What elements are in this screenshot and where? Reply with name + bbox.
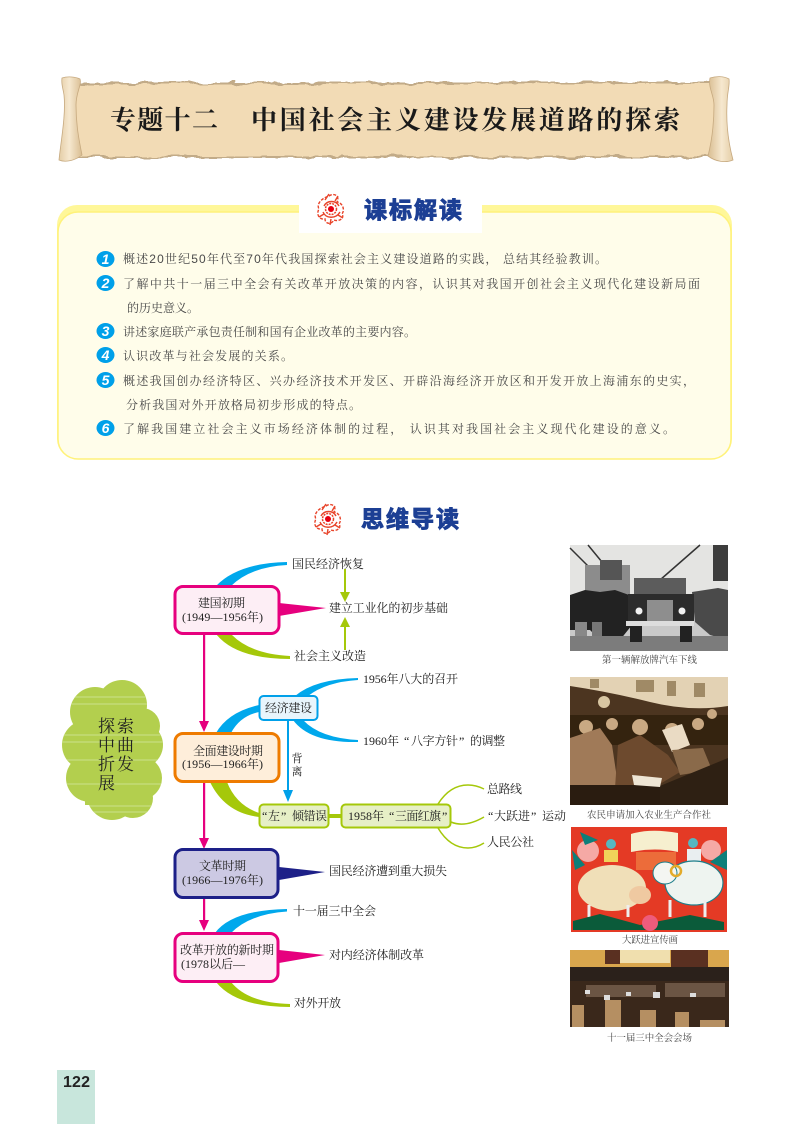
label: 大跃进运动	[488, 808, 566, 823]
box: 1958 三面红旗: ”	[442, 809, 447, 823]
box: 文革时期: 文革时期	[199, 858, 246, 873]
cloud text: 探	[98, 716, 115, 736]
box: 改革开放的新时期: (1978以后—	[181, 957, 246, 971]
label: 国民经济恢复: 国民经济恢复	[292, 556, 364, 571]
label: 1960年八字方针: 的调整	[470, 733, 505, 748]
label: 大跃进运动: 大跃进	[494, 808, 530, 823]
item 3: 讲述家庭联产承包责任制和国有企业改革的主要内容。	[123, 324, 416, 339]
arrow: 背离: 背	[292, 751, 302, 765]
connector: error to three red banners	[329, 814, 341, 818]
label: 社会主义改造: 社会主义改造	[294, 648, 366, 663]
cloud text: 展	[98, 774, 115, 793]
scroll paper body	[66, 82, 722, 158]
badge 5: 5	[102, 372, 110, 388]
badge 1: 1	[102, 251, 110, 267]
heading text: 思维导读	[361, 506, 459, 532]
arrows: timeline	[199, 634, 209, 931]
heading: 课标解读: 课标解读	[364, 197, 462, 223]
panel back band	[57, 205, 732, 459]
heading tab	[299, 203, 482, 233]
box: 左倾错误: ”	[281, 809, 286, 823]
photo: Great Leap poster	[571, 827, 727, 932]
item 1: 概述20世纪50年代至70年代我国探索社会主义建设道路的实践， 总结其经验教训。	[123, 251, 607, 266]
box: 全面建设时期: 全面建设时期	[193, 743, 263, 758]
box: 建国初期: 建国初期	[198, 595, 245, 610]
title text: 专题十二	[110, 105, 218, 135]
label: 对内经济体制改革: 对内经济体制改革	[329, 947, 424, 962]
box: 左倾错误: 左	[268, 809, 280, 823]
wedge: cultural revolution	[279, 867, 325, 880]
box: 左倾错误	[260, 804, 328, 828]
page number tab	[57, 1070, 95, 1124]
caption: photo 4: 十一届三中全会会场	[607, 1032, 692, 1044]
label: 1956年八大的召开: 1956年八大的召开	[363, 671, 458, 686]
badge 6	[96, 420, 114, 436]
item 4: 认识改革与社会发展的关系。	[123, 348, 293, 363]
box: 建国初期: (1949—1956年)	[182, 609, 263, 624]
cloud text: 折	[98, 755, 115, 774]
label: 建立工业化的初步基础: 建立工业化的初步基础	[329, 600, 448, 615]
box: 1958 三面红旗: “	[389, 809, 394, 823]
label: 1960年八字方针: “	[404, 734, 409, 748]
item 2: 了解中共十一届三中全会有关改革开放决策的内容，认识其对我国开创社会主义现代化建设新局面	[123, 276, 700, 291]
heading: thinking guide	[315, 504, 459, 535]
label: 1960年八字方针	[363, 733, 505, 748]
badge 4	[96, 347, 114, 363]
box: 改革开放的新时期	[175, 934, 278, 982]
crowd right	[692, 588, 728, 640]
box: 全面建设时期: (1956—1966年)	[182, 756, 263, 771]
badge 2	[96, 275, 114, 291]
badge 3	[96, 323, 114, 339]
photo: farmers join cooperative	[570, 677, 728, 805]
label: 对外开放: 对外开放	[294, 995, 341, 1010]
item 5: 分析我国对外开放格局初步形成的特点。	[126, 397, 361, 412]
branches: construction period	[210, 678, 358, 817]
branches: reform period	[215, 909, 325, 1007]
item 2: 的历史意义。	[127, 300, 199, 315]
page number: 122	[63, 1074, 90, 1091]
icon: dragon	[315, 504, 340, 535]
caption: photo 2: 农民申请加入农业生产合作社	[587, 809, 711, 821]
box: 文革时期	[175, 850, 278, 898]
box: 左倾错误: 倾错误	[292, 808, 327, 823]
badge 6: 6	[102, 420, 110, 436]
photo: Third Plenary Session hall	[570, 950, 729, 1027]
label: 人民公社: 人民公社	[487, 834, 534, 849]
photo: first Jiefang truck	[570, 545, 728, 651]
cloud text	[98, 716, 134, 793]
arrow: 背离	[283, 720, 302, 802]
arrow: 背离: 离	[292, 765, 302, 778]
badge 1	[96, 251, 114, 267]
badge 2: 2	[101, 275, 110, 291]
caption: photo 3: 大跃进宣传画	[622, 934, 678, 946]
box: 全面建设时期	[175, 734, 279, 782]
cloud node: main theme	[60, 680, 165, 820]
box: 1958 三面红旗	[342, 804, 450, 828]
badge 4: 4	[101, 347, 110, 363]
box: 1958 三面红旗: 三面红旗	[395, 809, 441, 823]
arrows: into foundation	[340, 569, 350, 650]
label: 国民经济遭到重大损失: 国民经济遭到重大损失	[329, 863, 447, 878]
label: 大跃进运动: “	[488, 809, 493, 823]
caption: photo 1: 第一辆解放牌汽车下线	[602, 654, 697, 666]
left scroll roll	[59, 77, 82, 161]
cloud text: 曲	[117, 736, 134, 755]
label: 1960年八字方针: 1960年	[363, 733, 399, 748]
cloud text: 中	[98, 736, 115, 755]
box: 建国初期	[175, 586, 279, 634]
title text main: 中国社会主义建设发展道路的探索	[251, 105, 680, 135]
box: 经济建设: 经济建设	[265, 700, 312, 715]
box: 改革开放的新时期: 改革开放的新时期	[180, 942, 274, 957]
box: 左倾错误: “	[262, 809, 267, 823]
mind map	[60, 556, 566, 1010]
item 6: 了解我国建立社会主义市场经济体制的过程， 认识其对我国社会主义现代化建设的意义。	[123, 421, 675, 436]
cloud text: 索	[117, 717, 134, 736]
box: 文革时期: (1966—1976年)	[182, 872, 263, 887]
item 5: 概述我国创办经济特区、兴办经济技术开发区、开辟沿海经济开放区和开发开放上海浦东的史实，	[123, 373, 695, 388]
branches: three red banners	[438, 785, 484, 848]
cloud text: 发	[117, 755, 134, 774]
right scroll roll	[708, 77, 733, 162]
label: 1960年八字方针: 八字方针	[411, 733, 458, 748]
box: 经济建设	[260, 696, 318, 720]
panel inner	[58, 212, 731, 459]
title scroll banner	[59, 77, 733, 162]
badge 3: 3	[102, 323, 110, 339]
label: 十一届三中全会: 十一届三中全会	[293, 903, 376, 918]
panel: curriculum reading	[57, 194, 732, 459]
label: 大跃进运动: ”	[531, 809, 536, 823]
crowd left	[570, 590, 632, 640]
icon: dragon	[318, 194, 343, 225]
label: 大跃进运动: 运动	[542, 808, 566, 823]
badge 5	[96, 372, 114, 388]
branches: founding period	[216, 562, 326, 659]
item 5	[123, 373, 695, 412]
label: 1960年八字方针: ”	[459, 734, 464, 748]
item 2	[123, 276, 700, 315]
label: 总路线: 总路线	[487, 781, 522, 796]
box: 1958 三面红旗: 1958年	[348, 808, 384, 823]
